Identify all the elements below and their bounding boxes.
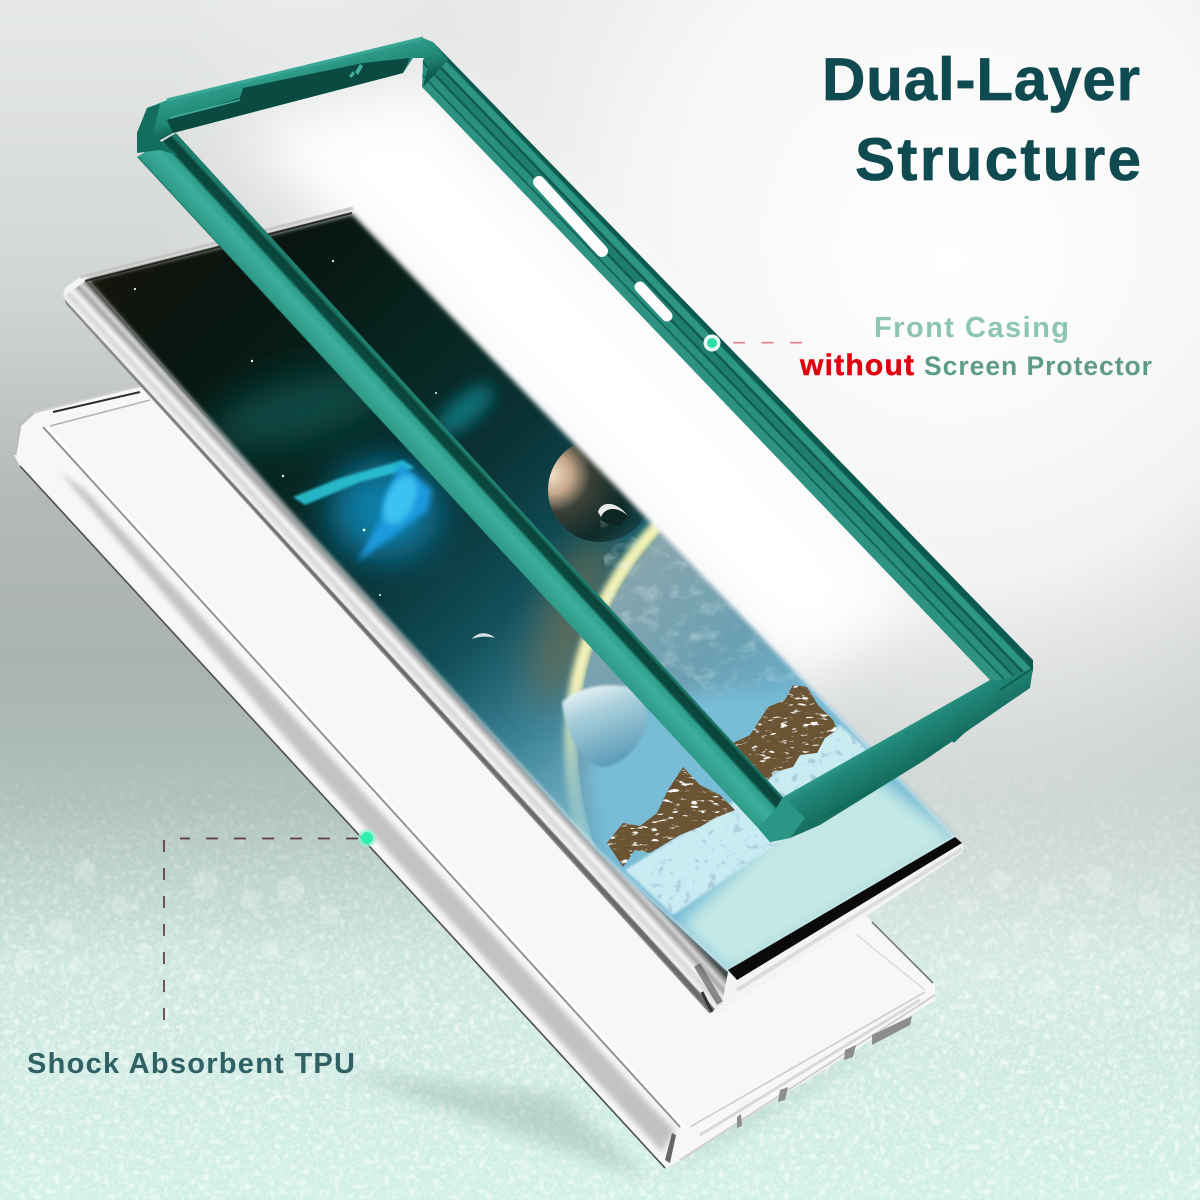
snow globe <box>625 725 885 915</box>
casing logo mark <box>349 64 363 78</box>
title: Dual-Layer <box>822 46 1140 113</box>
case rim lines <box>15 387 935 1168</box>
phone screen wallpaper <box>84 210 956 974</box>
casing right band <box>422 42 1033 690</box>
tiny moon <box>472 633 495 639</box>
case left rim shadow <box>60 472 675 1152</box>
mountains <box>607 685 837 867</box>
casing bottom band <box>770 668 1033 842</box>
phone chrome side band <box>63 280 728 1013</box>
casing side buttons <box>824 728 968 817</box>
label: Shock Absorbent TPU <box>27 1048 355 1080</box>
case body <box>14 387 935 1168</box>
casing top band <box>137 38 448 153</box>
marker dot <box>704 334 720 352</box>
pale horizon <box>676 780 954 972</box>
case cast shadow <box>340 1010 940 1185</box>
callout: front casing <box>704 312 1152 382</box>
casing bottom corner <box>758 797 805 842</box>
crescent moon <box>598 504 628 526</box>
case port cutouts <box>665 1016 912 1163</box>
panel: green front casing <box>137 38 1033 842</box>
phone black bezel <box>728 837 962 980</box>
panel: transparent TPU case <box>14 387 940 1185</box>
planet clouds <box>600 520 810 700</box>
warm halo <box>516 526 624 714</box>
title: Structure <box>855 126 1141 193</box>
label line two <box>799 349 1152 382</box>
phone chrome edge <box>66 208 962 1013</box>
small planet <box>548 444 646 542</box>
phone chrome body <box>63 208 963 1013</box>
panel: phone <box>63 206 963 1014</box>
leader line horizontal <box>180 838 358 840</box>
casing highlights <box>167 38 1033 690</box>
leader line <box>733 342 802 344</box>
label line one: Front Casing <box>874 312 1069 344</box>
floating rock <box>562 685 648 767</box>
label line two: without <box>799 349 914 382</box>
casing corner top-left <box>137 104 178 155</box>
nebula <box>205 358 501 562</box>
label line two: Screen Protector <box>924 351 1152 381</box>
callout: TPU <box>27 829 376 1080</box>
casing button slot upper <box>539 182 602 251</box>
marker dot <box>358 829 376 847</box>
large planet <box>578 532 955 972</box>
top band dark recess <box>167 58 410 133</box>
large planet rim <box>560 520 663 846</box>
title <box>822 46 1141 193</box>
lower sky <box>581 686 903 920</box>
stars <box>134 260 437 596</box>
casing button slot lower <box>640 287 667 316</box>
leader line vertical <box>163 840 165 1020</box>
casing left band <box>137 133 790 842</box>
